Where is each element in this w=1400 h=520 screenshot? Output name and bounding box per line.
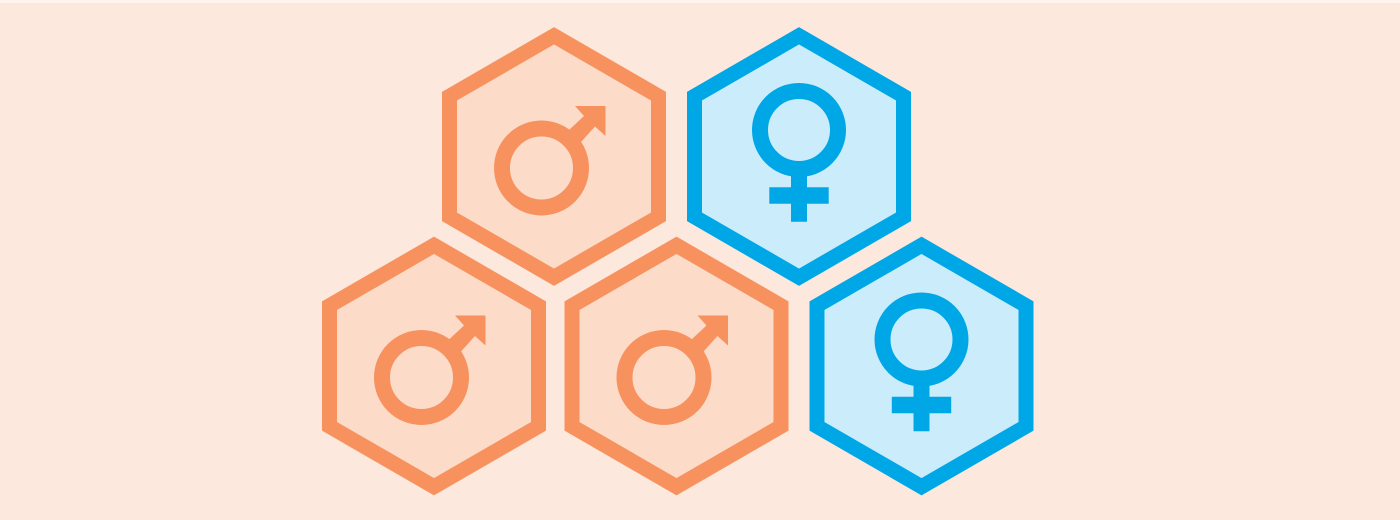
hexagon: male, bottom middle <box>572 245 781 487</box>
hexagon: male, bottom left <box>330 245 538 487</box>
hexagon: male, top left <box>450 36 658 277</box>
hexagon: female, bottom right <box>817 245 1026 487</box>
hexagon: female, top right <box>694 36 904 277</box>
